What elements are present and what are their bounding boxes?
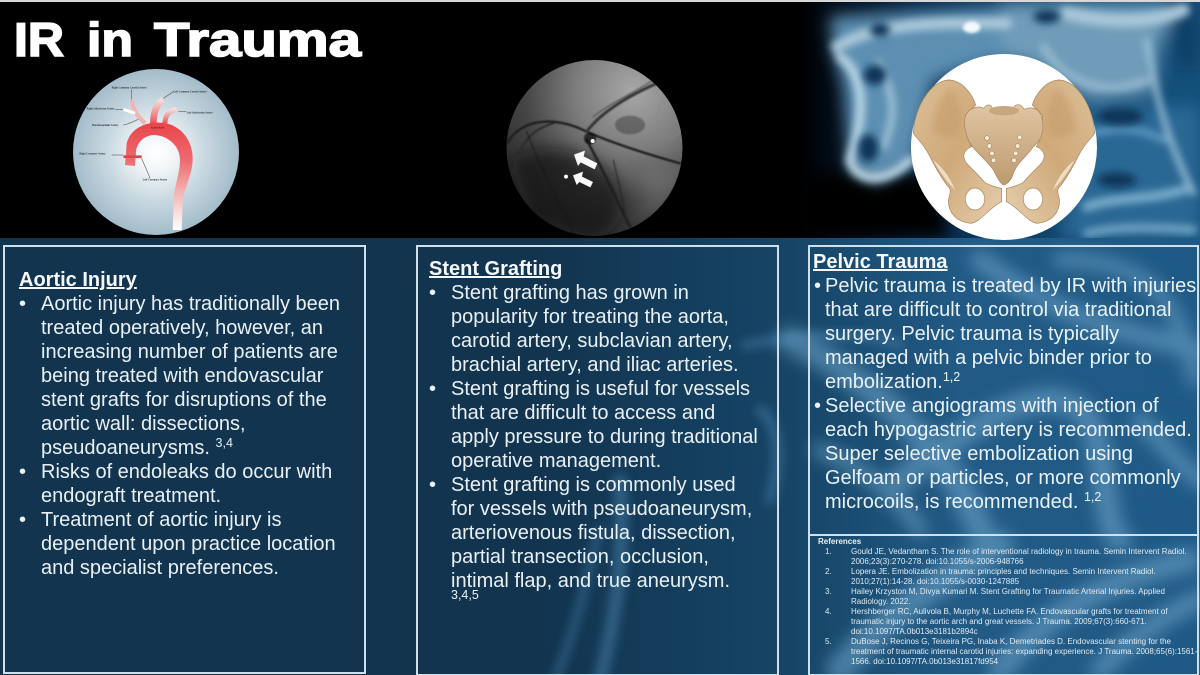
reference list: DuBose J, Recinos G, Teixeira PG, Inaba K, Demetriades D. Endovascular stenting for the xyxy=(851,637,1171,646)
image: aortic arch anatomy diagram in circle: Left Coronary Artery xyxy=(143,178,168,181)
reference list: Lopera JE. Embolization in trauma: principles and techniques. Semin Intervent Radiol. xyxy=(851,567,1156,576)
bullet list: stent grafting: Stent grafting is commonly used xyxy=(451,474,736,496)
bullet list: pelvic trauma: each hypogastric artery is recommended. xyxy=(825,419,1192,441)
reference list: 2010;27(1):14-28. doi:10.1055/s-0030-1247885 xyxy=(851,577,1019,586)
bullet list: pelvic trauma: surgery. Pelvic trauma is typically xyxy=(825,323,1119,345)
title: Trauma xyxy=(154,13,362,66)
bullet list: pelvic trauma: microcoils, is recommended. 1,2 xyxy=(825,490,1101,513)
bullet list: aortic injury: dependent upon practice location xyxy=(41,533,336,555)
bullet list: stent grafting: Stent grafting has grown in xyxy=(451,282,689,304)
bullet list: stent grafting: Stent grafting is useful for vessels xyxy=(451,378,750,400)
panel: references: 1. xyxy=(825,547,832,556)
bullet list: stent grafting: intimal flap, and true aneurysm. xyxy=(451,570,730,592)
title: in xyxy=(87,13,133,66)
sub: left hip bone xyxy=(913,80,1002,223)
reference list xyxy=(825,547,1197,666)
bullet list: pelvic trauma: Selective angiograms with injection of xyxy=(825,395,1159,417)
bullet list: stent grafting: that are difficult to access and xyxy=(451,402,715,424)
bullet list: aortic injury: endograft treatment. xyxy=(41,485,221,507)
panel: references: 4. xyxy=(825,607,832,616)
bullet list: stent grafting: arteriovenous fistula, dissection, xyxy=(451,522,736,544)
image: aortic arch anatomy diagram in circle xyxy=(73,54,1097,240)
image: aortic arch anatomy diagram in circle: Right Common Carotid Artery xyxy=(112,86,147,89)
panel: pelvic trauma xyxy=(808,245,1199,536)
reference list: Gould JE, Vedantham S. The role of interventional radiology in trauma. Semin Intervent Radiol. xyxy=(851,547,1187,556)
reference list: 1566. doi:10.1097/TA.0b013e31817fd954 xyxy=(851,657,998,666)
bullet list: aortic injury: pseudoaneurysms. 3,4 xyxy=(41,436,233,459)
image: aortic arch anatomy diagram in circle: Right Subclavian Artery xyxy=(87,107,115,110)
bullet list: aortic injury: being treated with endovascular xyxy=(41,365,323,387)
panel: stent grafting xyxy=(416,245,779,675)
citation: stent grafting: 3,4,5 xyxy=(451,588,479,602)
panel: references: 5. xyxy=(825,637,832,646)
bullet list: aortic injury: Risks of endoleaks do occur with xyxy=(41,461,332,483)
image: aortic arch anatomy diagram in circle: Right Coronary Artery xyxy=(79,153,106,156)
bullet list: stent grafting: brachial artery, and iliac arteries. xyxy=(451,354,739,376)
bullet list: stent grafting: carotid artery, subclavian artery, xyxy=(451,330,733,352)
bullet list: stent grafting: partial transection, occlusion, xyxy=(451,546,709,568)
reference list: 2006;23(3):270-278. doi:10.1055/s-2006-948766 xyxy=(851,557,1024,566)
bullet list: aortic injury xyxy=(20,293,340,579)
sub: vessels xyxy=(123,100,193,230)
image: aortic arch anatomy diagram in circle: Left Subclavian Artery xyxy=(187,111,213,114)
image: aortic arch anatomy diagram in circle: Brachiocephalic Artery xyxy=(92,124,119,127)
reference list: Radiology. 2022. xyxy=(851,597,910,606)
bullet list: pelvic trauma: Gelfoam or particles, or more commonly xyxy=(825,467,1181,489)
bullet list: stent grafting: operative management. xyxy=(451,450,661,472)
reference list: Hershberger RC, Aulivola B, Murphy M, Luchette FA. Endovascular grafts for treatment of xyxy=(851,607,1168,616)
bullet list: pelvic trauma xyxy=(814,275,1196,513)
bullet list: aortic injury: treated operatively, however, an xyxy=(41,317,323,339)
reference list: traumatic injury to the aortic arch and great vessels. J Trauma. 2009;67(3):660-671. xyxy=(851,617,1147,626)
bullet list: pelvic trauma: that are difficult to control via traditional xyxy=(825,299,1171,321)
panel: references xyxy=(808,534,1199,675)
bullet list: pelvic trauma: Pelvic trauma is treated by IR with injuries xyxy=(825,275,1196,297)
bullet list: aortic injury: stent grafts for disruptions of the xyxy=(41,389,327,411)
bullet list: aortic injury: Aortic injury has traditionally been xyxy=(41,293,340,315)
bullet list: aortic injury: aortic wall: dissections, xyxy=(41,413,246,435)
bullet list: stent grafting: popularity for treating the aorta, xyxy=(451,306,729,328)
reference list: Hailey Krzyston M, Divya Kumari M. Stent Grafting for Traumatic Arterial Injuries. Applied xyxy=(851,587,1165,596)
bullet list: aortic injury: increasing number of patients are xyxy=(41,341,338,363)
bullet list: aortic injury: Treatment of aortic injury is xyxy=(41,509,281,531)
bullet list: pelvic trauma: managed with a pelvic binder prior to xyxy=(825,347,1152,369)
sub: white arrows and markers xyxy=(564,139,597,187)
sub: sacrum xyxy=(965,105,1043,185)
bullet list: pelvic trauma: embolization.1,2 xyxy=(825,370,960,393)
panel: aortic injury xyxy=(3,245,366,674)
bullet list: aortic injury: and specialist preferences. xyxy=(41,557,279,579)
image: aortic arch anatomy diagram in circle: Left Common Carotid Artery xyxy=(173,90,208,93)
sub: right hip bone xyxy=(1006,80,1095,223)
title xyxy=(14,13,362,66)
heading: references: References xyxy=(818,537,861,546)
image: aortic arch anatomy diagram in circle: Aortic Arch xyxy=(151,127,165,130)
panel: references: 2. xyxy=(825,567,832,576)
title: IR xyxy=(14,13,64,66)
reference list: doi:10.1097/TA.0b013e3181b2894c xyxy=(851,627,978,636)
panel: references: 3. xyxy=(825,587,832,596)
heading: pelvic trauma: Pelvic Trauma xyxy=(813,251,948,273)
bullet list: stent grafting: for vessels with pseudoaneurysm, xyxy=(451,498,752,520)
reference list: treatment of traumatic internal carotid injuries: expanding experience. J Trauma. 2008;65(6):1561- xyxy=(851,647,1197,656)
heading: aortic injury: Aortic Injury xyxy=(19,269,137,291)
heading: stent grafting: Stent Grafting xyxy=(429,258,562,280)
bullet list: stent grafting: apply pressure to during traditional xyxy=(451,426,758,448)
bullet list: pelvic trauma: Super selective embolization using xyxy=(825,443,1133,465)
bullet list: stent grafting xyxy=(430,282,758,592)
